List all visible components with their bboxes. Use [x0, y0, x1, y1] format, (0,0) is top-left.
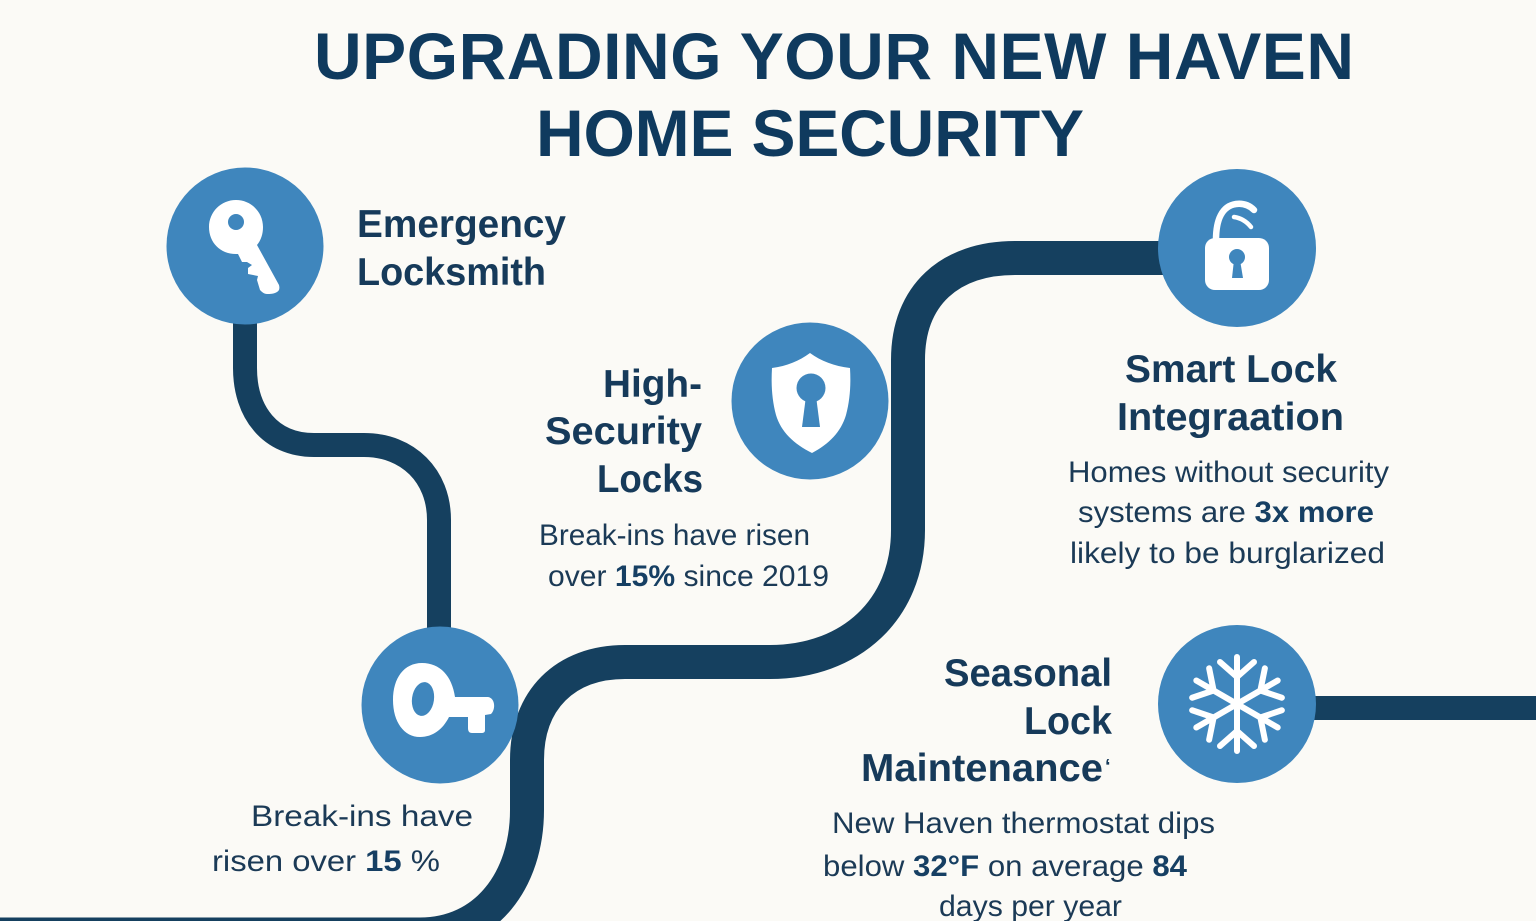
title: UPGRADING YOUR NEW HAVEN	[314, 19, 1354, 93]
heading: emergency locksmith: Locksmith	[357, 251, 546, 294]
heading: smart lock integration: Smart Lock	[1125, 348, 1337, 391]
text: high-security stat: Break-ins have risen	[539, 519, 810, 552]
text: high-security stat: over 15% since 2019	[548, 560, 829, 593]
heading: seasonal lock maintenance	[861, 652, 1112, 790]
icon: shield with keyhole	[732, 322, 888, 480]
path connector: main winding road	[0, 258, 1170, 921]
heading: high-security locks	[545, 363, 703, 501]
path connector: locksmith to key	[245, 320, 439, 632]
heading: seasonal lock maintenance: Seasonal	[944, 652, 1112, 695]
heading: high-security locks: High-	[603, 363, 702, 406]
text: seasonal stat: below 32°F on average 84	[823, 850, 1187, 883]
text: break-ins stat: risen over 15 %	[212, 845, 440, 878]
text: break-ins stat	[212, 800, 473, 878]
path connector: right exit	[1310, 696, 1536, 720]
heading: emergency locksmith	[357, 203, 566, 294]
icon: snowflake	[1158, 625, 1316, 783]
heading: seasonal lock maintenance: Lock	[1024, 700, 1112, 743]
title: HOME SECURITY	[536, 96, 1084, 170]
heading: emergency locksmith: Emergency	[357, 203, 566, 246]
text: high-security stat	[539, 519, 829, 593]
text: smart lock stat: systems are 3x more	[1078, 496, 1374, 529]
heading: seasonal lock maintenance: ‘	[1105, 756, 1111, 778]
title	[314, 19, 1354, 170]
heading: smart lock integration: Integraation	[1117, 396, 1344, 439]
text: break-ins stat: Break-ins have	[251, 800, 473, 833]
text: smart lock stat	[1068, 456, 1389, 570]
text: smart lock stat: Homes without security	[1068, 456, 1389, 489]
text: seasonal stat	[823, 807, 1215, 921]
heading: smart lock integration	[1117, 348, 1344, 439]
icon: key horizontal	[362, 626, 518, 784]
heading: high-security locks: Security	[545, 410, 702, 453]
text: smart lock stat: likely to be burglarized	[1070, 537, 1385, 570]
icon: open smart lock	[1158, 169, 1316, 327]
heading: high-security locks: Locks	[597, 458, 703, 501]
heading: seasonal lock maintenance: Maintenance	[861, 747, 1103, 790]
text: seasonal stat: New Haven thermostat dips	[832, 807, 1215, 840]
icon: emergency locksmith key	[166, 168, 324, 324]
